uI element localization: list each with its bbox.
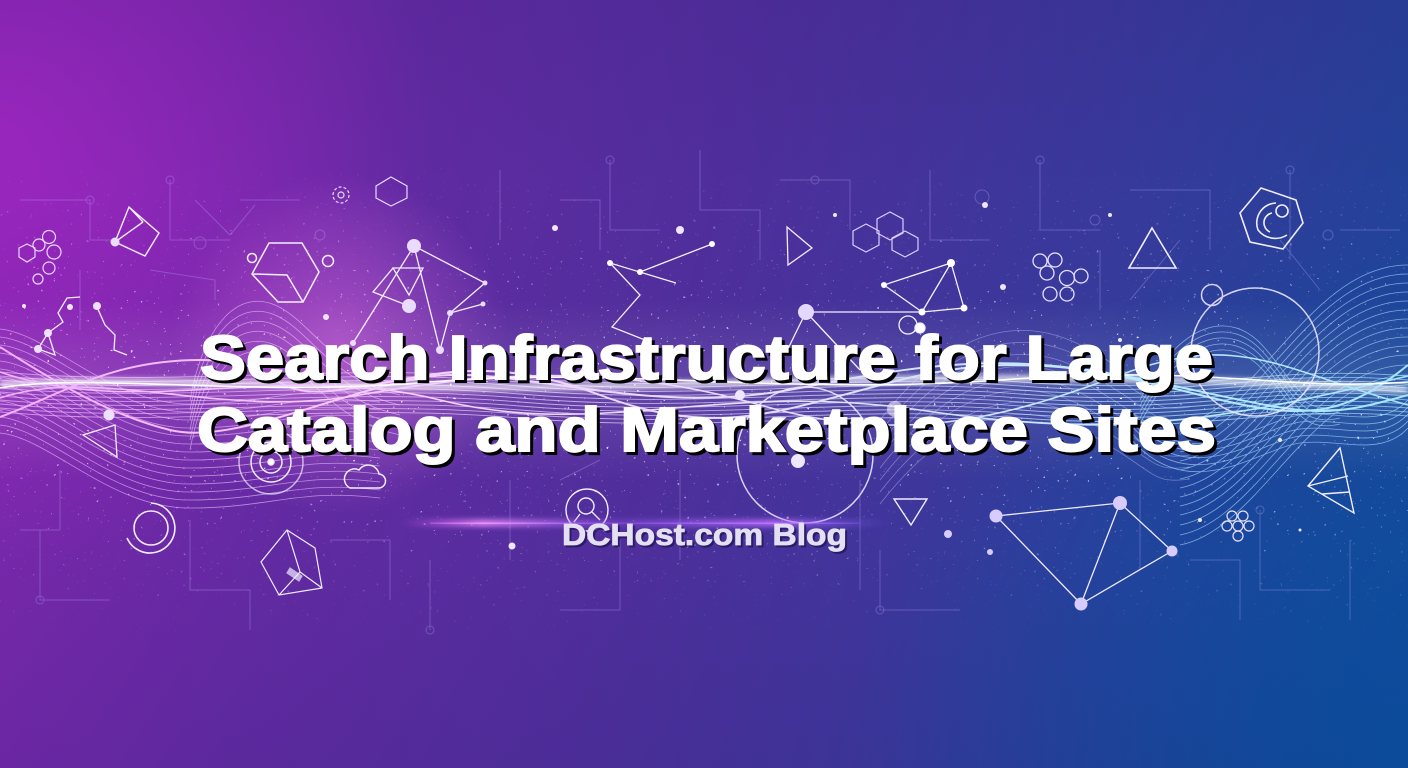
icon: cell cluster right: [1222, 511, 1254, 541]
title: [197, 324, 1219, 468]
network: center right: [780, 259, 968, 370]
icon: small triangle: [787, 227, 812, 265]
icon: triangle lower center: [894, 499, 927, 525]
network: lower right: [944, 496, 1178, 610]
icon: diamond top left: [110, 207, 159, 256]
icon: cube left: [248, 243, 334, 302]
icon: triangle left and squiggles: [34, 297, 127, 457]
title: Search Infrastructure for Large: [200, 324, 1213, 393]
larger particles: [22, 202, 1302, 550]
title: Catalog and Marketplace Sites: [197, 396, 1216, 465]
icon: polyhedron lower left: [261, 530, 322, 595]
subtitle: DCHost.com Blog: [562, 517, 847, 552]
network: left triangle cluster: [350, 239, 488, 354]
title: Search Infrastructure for Large: [203, 327, 1216, 396]
icon: pyramid right: [1308, 448, 1354, 513]
star particle field: [0, 160, 1408, 640]
large outline circles: [737, 284, 1319, 523]
icon: hexagons center: [853, 212, 918, 257]
icon: small molecule: [333, 187, 349, 203]
icon: ring loader: [127, 503, 175, 553]
faint circuit pattern: [20, 150, 1400, 634]
left wave mesh: [0, 301, 400, 508]
lens flare behind subtitle: [400, 520, 890, 526]
icon: hexagon cluster left: [19, 230, 61, 284]
right wave mesh: [1130, 265, 1408, 545]
icon: circle cluster right: [1033, 253, 1088, 301]
icon: target rings: [239, 430, 303, 494]
icon: triangle top right: [1129, 228, 1176, 268]
title: Catalog and Marketplace Sites: [200, 399, 1219, 468]
icon: top hexagon: [376, 177, 407, 206]
icon: cloud: [344, 465, 386, 488]
subtitle: DCHost.com Blog: [564, 519, 849, 554]
centre right wave mesh: [880, 330, 1190, 504]
glowing wave band: [0, 347, 1408, 433]
icon: magnifier in circle: [566, 489, 608, 531]
icon: hexagon badge top right: [1240, 188, 1303, 249]
network: zigzag center: [607, 241, 715, 345]
